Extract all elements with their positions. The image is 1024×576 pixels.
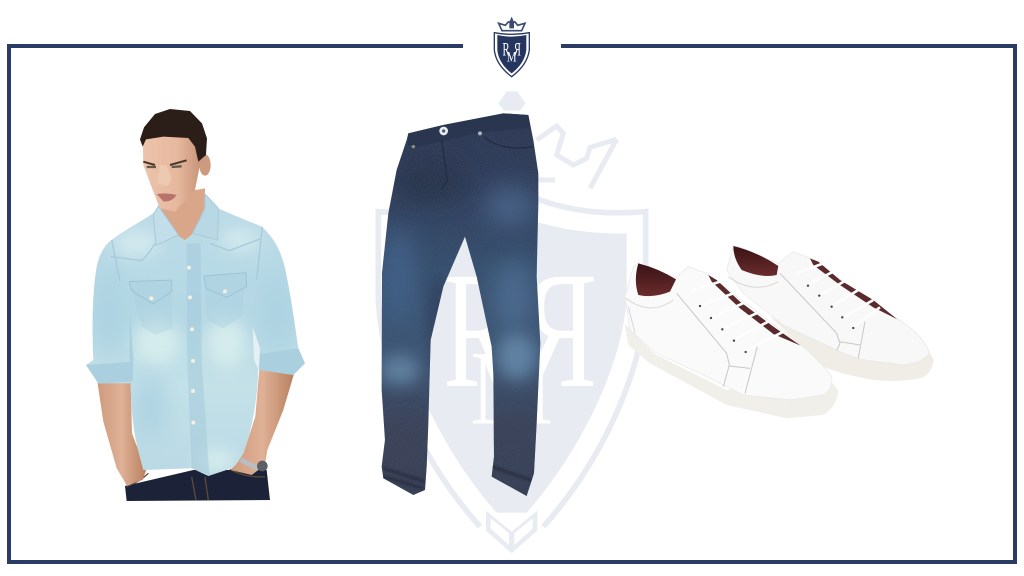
watermark monogram: R (443, 237, 517, 423)
watermark monogram: M (470, 329, 553, 447)
watermark monogram: R (519, 239, 597, 423)
front tongue shadow (708, 275, 801, 346)
watermark sword pommel (498, 91, 526, 111)
rolled cuffs (86, 362, 133, 384)
watermark: crest behind the jeans (378, 91, 646, 553)
rivets (478, 131, 482, 135)
pocket seam (484, 137, 533, 148)
watermark sword tip (486, 511, 537, 553)
logo monogram (502, 39, 521, 65)
waistband (408, 113, 531, 147)
dark jeans (377, 110, 547, 500)
white sneakers (625, 246, 933, 418)
shirt yoke seams (111, 227, 262, 282)
logo: crest at top (494, 17, 529, 77)
logo monogram: R (502, 39, 510, 60)
front stitching (677, 293, 757, 393)
rear stitching (780, 273, 865, 358)
nose (157, 165, 172, 186)
shirt collar (153, 206, 178, 245)
front sneaker (625, 263, 838, 418)
dark trousers (125, 470, 270, 501)
logo shield fill (497, 35, 526, 73)
front sole (625, 323, 838, 418)
front eyelets (699, 305, 747, 353)
rear sneaker (727, 246, 933, 381)
logo crown (499, 22, 525, 31)
logo shield outline (494, 33, 529, 77)
jeans fading (377, 110, 547, 500)
logo monogram: M (507, 48, 517, 65)
neck (157, 188, 205, 240)
rear lining (733, 246, 778, 276)
right arm (231, 369, 294, 475)
rear sole (770, 317, 933, 381)
wristwatch (239, 457, 268, 471)
shirt buttons (149, 266, 227, 425)
right chest pocket (204, 273, 246, 328)
rear eyelets (807, 284, 854, 329)
ear (199, 154, 211, 176)
head (140, 109, 211, 212)
waist button (439, 127, 448, 135)
lips (157, 194, 177, 201)
rear upper (727, 247, 929, 365)
rear tongue shadow (810, 258, 897, 319)
model wearing denim shirt (86, 109, 305, 501)
front laces (690, 282, 783, 351)
logo sword pommel (509, 17, 514, 28)
button placket (187, 243, 209, 475)
rear laces (797, 263, 880, 327)
front upper (625, 263, 832, 400)
eyes (147, 163, 182, 170)
watermark shield outline (378, 187, 646, 527)
watermark monogram (443, 237, 597, 447)
left arm (97, 382, 146, 485)
left chest pocket (129, 280, 173, 335)
hair (140, 109, 207, 162)
eyebrows (143, 160, 187, 165)
watermark shield fill (397, 213, 627, 513)
face (143, 133, 201, 212)
logo monogram: R (513, 39, 521, 60)
fly seam (442, 140, 447, 190)
front lining (636, 263, 676, 296)
watermark crown (537, 126, 617, 188)
denim shirt (86, 195, 305, 476)
shirt gaps between sleeves and body (129, 313, 133, 383)
